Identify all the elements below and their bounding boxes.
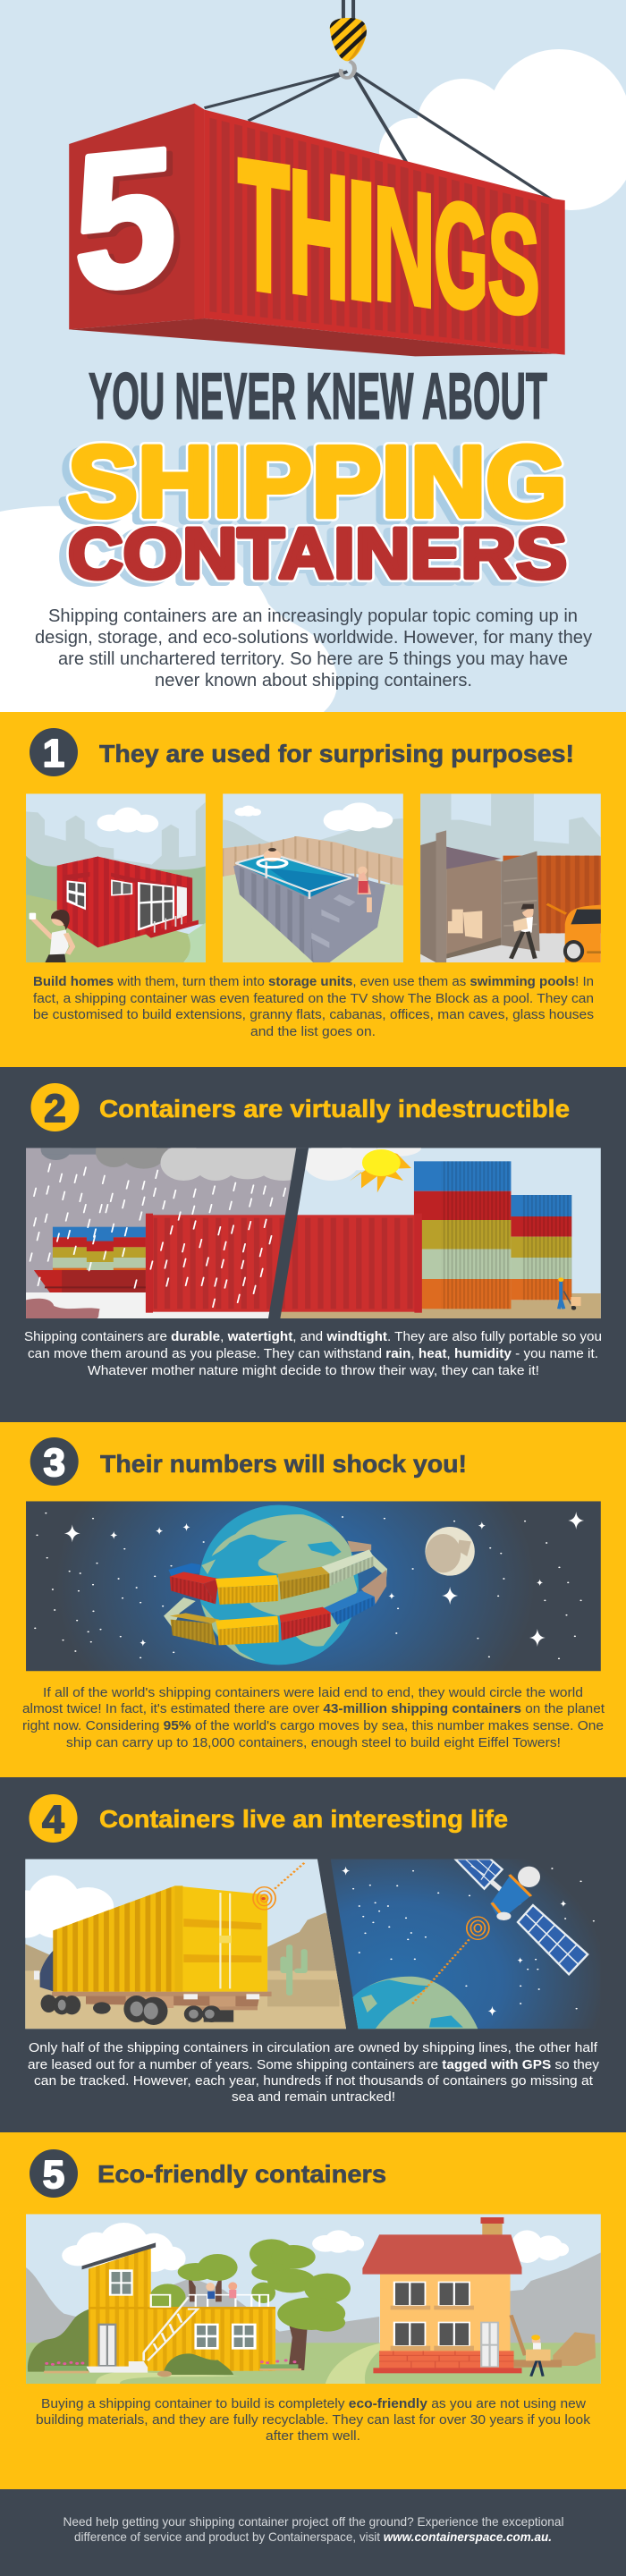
satellite bbox=[491, 1881, 519, 1905]
section 5 body text bbox=[36, 2396, 591, 2444]
title word: containers: CONTAINERS bbox=[61, 517, 560, 597]
footer bbox=[0, 2489, 626, 2576]
heading 4: Containers live an interesting life bbox=[99, 1805, 508, 1833]
panel: section 5 bbox=[0, 2132, 626, 2489]
footer text bbox=[63, 2514, 563, 2544]
word THINGS on container: G bbox=[434, 168, 488, 343]
intro text bbox=[35, 606, 592, 691]
number badge 4 bbox=[29, 1794, 77, 1843]
section 3 body text: right now. Considering 95% of the world's cargo moves by sea, this number makes sense. One bbox=[22, 1718, 604, 1733]
section 4 body text: Only half of the shipping containers in circulation are owned by shipping lines, the other half bbox=[29, 2040, 598, 2055]
section 1 body text: and the list goes on. bbox=[250, 1024, 376, 1039]
number badge 2 bbox=[30, 1083, 79, 1131]
title word: containers: CONTAINERS bbox=[68, 513, 567, 593]
section 2 body text: Shipping containers are durable, watertight, and windtight. They are also fully portable so you bbox=[24, 1329, 602, 1344]
word THINGS on container: S bbox=[487, 182, 540, 346]
panel: section 2 bbox=[0, 1067, 626, 1422]
footer text: difference of service and product by Containerspace, visit www.containerspace.com.au. bbox=[74, 2529, 552, 2544]
illustration: container storage bbox=[420, 793, 601, 962]
section 4 body text: are leased out for a number of years. Some shipping containers are tagged with GPS so they bbox=[28, 2057, 600, 2072]
word THINGS on container: N bbox=[373, 152, 436, 342]
number badge 1 bbox=[30, 728, 78, 776]
section 1 body text bbox=[33, 974, 594, 1039]
shrub bbox=[28, 2309, 89, 2372]
moon bbox=[425, 1527, 475, 1576]
tree big bbox=[289, 2326, 308, 2370]
title word: shipping: SHIPPING bbox=[61, 429, 560, 541]
intro text: never known about shipping containers. bbox=[155, 671, 472, 691]
number 5 on container: 5 bbox=[80, 110, 182, 336]
heading 1: They are used for surprising purposes! bbox=[99, 740, 574, 767]
word THINGS on container: I bbox=[345, 146, 377, 337]
tree small bbox=[189, 2280, 222, 2302]
number badge 5: 5 bbox=[43, 2153, 64, 2197]
illustration: satellite tracking bbox=[331, 1859, 600, 2029]
footer text: Need help getting your shipping container project off the ground? Experience the exceptional bbox=[63, 2514, 563, 2529]
containers ring bbox=[168, 1563, 200, 1577]
word THINGS on container: T bbox=[238, 120, 290, 333]
illustration: container swimming pool bbox=[223, 793, 403, 962]
illustration: container home and conventional house bbox=[26, 2214, 601, 2384]
panel: hero sky bbox=[0, 0, 626, 712]
illustration: truck with GPS-tagged container bbox=[2, 1859, 349, 2029]
illustration: globe wrapped in containers bbox=[26, 1501, 601, 1671]
number badge 1: 1 bbox=[43, 732, 64, 775]
earth bbox=[199, 1505, 359, 1665]
illustration: container home bbox=[26, 793, 206, 962]
section 4 body text: sea and remain untracked! bbox=[232, 2089, 395, 2105]
deck and stairs bbox=[151, 2295, 170, 2307]
panel: section 4 bbox=[0, 1777, 626, 2132]
section 2 body text: can move them around as you please. They can withstand rain, heat, humidity - you name it. bbox=[28, 1346, 598, 1361]
heading 2: Containers are virtually indestructible bbox=[99, 1095, 570, 1123]
rain bbox=[30, 1164, 285, 1307]
earth limb bbox=[352, 1977, 478, 2029]
number 5 on container: 5 bbox=[74, 106, 176, 332]
worker and timber bbox=[553, 2332, 596, 2366]
intro text: Shipping containers are an increasingly popular topic coming up in bbox=[48, 606, 578, 626]
flowers bbox=[45, 2364, 298, 2371]
lawn bbox=[26, 2343, 601, 2384]
number badge 2: 2 bbox=[44, 1087, 66, 1131]
title word: shipping: SHIPPING bbox=[68, 426, 567, 538]
number badge 4: 4 bbox=[42, 1798, 64, 1842]
word THINGS on container bbox=[238, 120, 540, 346]
section 3 body text: ship can carry up to 18,000 containers, enough steel to build eight Eiffel Towers! bbox=[66, 1735, 561, 1750]
panel: section 3 bbox=[0, 1422, 626, 1777]
stars bbox=[35, 1513, 581, 1658]
section 1 body text: Build homes with them, turn them into storage units, even use them as swimming pools! In bbox=[33, 974, 594, 989]
number badge 3 bbox=[30, 1437, 79, 1486]
section 3 body text: almost twice! In fact, it's estimated there are over 43-million shipping containers on the planet bbox=[22, 1701, 605, 1716]
section 4 body text: can be tracked. However, each year, hundreds if not thousands of containers go missing at bbox=[34, 2073, 594, 2089]
cloud: upper right bbox=[379, 49, 626, 210]
section 1 body text: fact, a shipping container was even featured on the TV show The Block as a pool. They can bbox=[33, 991, 594, 1006]
section 4 body text bbox=[28, 2040, 600, 2105]
number badge 3: 3 bbox=[43, 1441, 65, 1485]
panel: section 1 bbox=[0, 712, 626, 1067]
section 5 body text: Buying a shipping container to build is completely eco-friendly as you are not using new bbox=[41, 2396, 586, 2411]
section 5 body text: after them well. bbox=[266, 2428, 360, 2444]
section 1 body text: be customised to build extensions, granny flats, cabanas, offices, man caves, glass houses bbox=[33, 1007, 594, 1022]
intro text: are still unchartered territory. So here are 5 things you may have bbox=[58, 649, 568, 669]
title word: shipping: SHIPPING bbox=[68, 426, 567, 538]
crane hook and slings bbox=[205, 0, 553, 200]
section 2 body text bbox=[24, 1329, 602, 1378]
title word: containers: CONTAINERS bbox=[68, 513, 567, 593]
house bbox=[380, 2274, 511, 2351]
cloud: lower left bbox=[0, 506, 337, 712]
shipping container illustration bbox=[69, 104, 565, 356]
number badge 5 bbox=[30, 2149, 78, 2198]
clouds bbox=[62, 2223, 569, 2272]
section 5 body text: building materials, and they are fully recyclable. They can last for over 30 years if you look bbox=[36, 2412, 591, 2428]
section 3 body text: If all of the world's shipping containers were laid end to end, they would circle the world bbox=[43, 1685, 583, 1700]
section 3 body text bbox=[22, 1685, 605, 1750]
heading 3: Their numbers will shock you! bbox=[100, 1450, 467, 1478]
word THINGS on container: H bbox=[288, 131, 350, 337]
intro text: design, storage, and eco-solutions worldwide. However, for many they bbox=[35, 628, 592, 648]
container home bbox=[89, 2248, 151, 2308]
illustration: storm and sun containers bbox=[26, 1138, 601, 1318]
mountains bbox=[26, 2267, 379, 2343]
section 2 body text: Whatever mother nature might decide to throw their way, they can take it! bbox=[88, 1363, 539, 1378]
heading 5: Eco-friendly containers bbox=[97, 2160, 386, 2188]
